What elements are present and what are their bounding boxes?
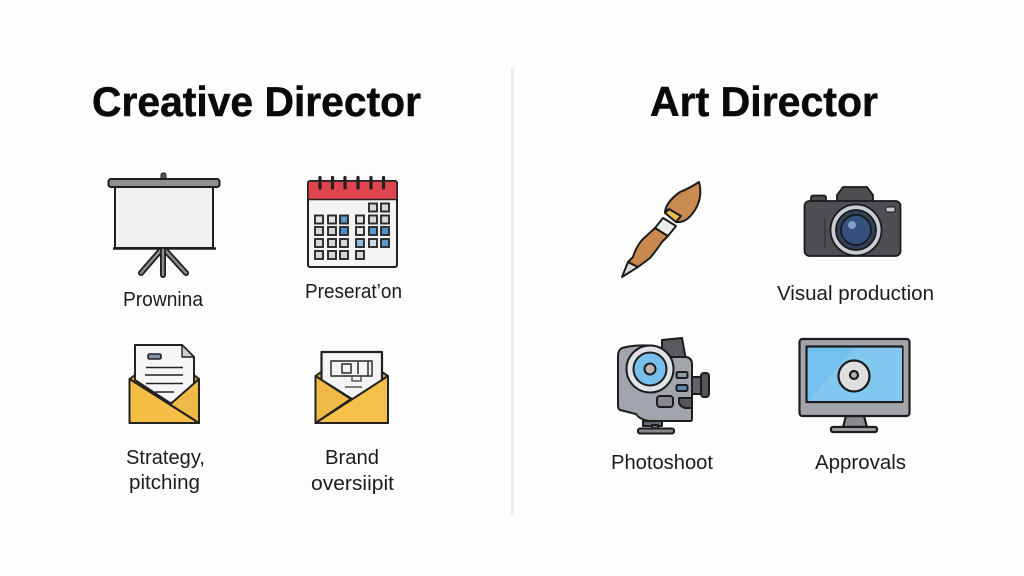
label: Prownina: Prownina	[123, 289, 204, 311]
label: Preseration: Preserat’on	[305, 281, 402, 303]
label: Approvals: Approvals	[815, 452, 906, 474]
label: Visual production: Visual production	[777, 283, 934, 305]
label: Brand oversiipit: Brand	[325, 447, 379, 469]
label: Strategy, pitching: Strategy,	[126, 447, 205, 469]
icon: photo camera	[804, 187, 900, 256]
icon: calendar	[308, 178, 397, 267]
panel: Art Director	[611, 78, 934, 474]
label: Brand oversiipit	[311, 447, 394, 495]
heading: Art Director: Art Director	[650, 78, 878, 125]
heading: Creative Director: Creative Director	[92, 78, 421, 125]
label: Photoshoot: Photoshoot	[611, 452, 713, 474]
label: Strategy, pitching	[126, 447, 205, 494]
icon: paintbrush	[622, 182, 700, 277]
label: Brand oversiipit: oversiipit	[311, 473, 394, 495]
panel: Creative Director	[92, 78, 421, 495]
icon: projector screen	[108, 173, 220, 275]
icon: video camera	[618, 338, 709, 434]
icon: envelope with document	[130, 345, 199, 423]
label: Strategy, pitching: pitching	[129, 472, 200, 494]
icon: envelope with layout sheet	[316, 352, 388, 423]
icon: desktop monitor	[800, 339, 910, 432]
